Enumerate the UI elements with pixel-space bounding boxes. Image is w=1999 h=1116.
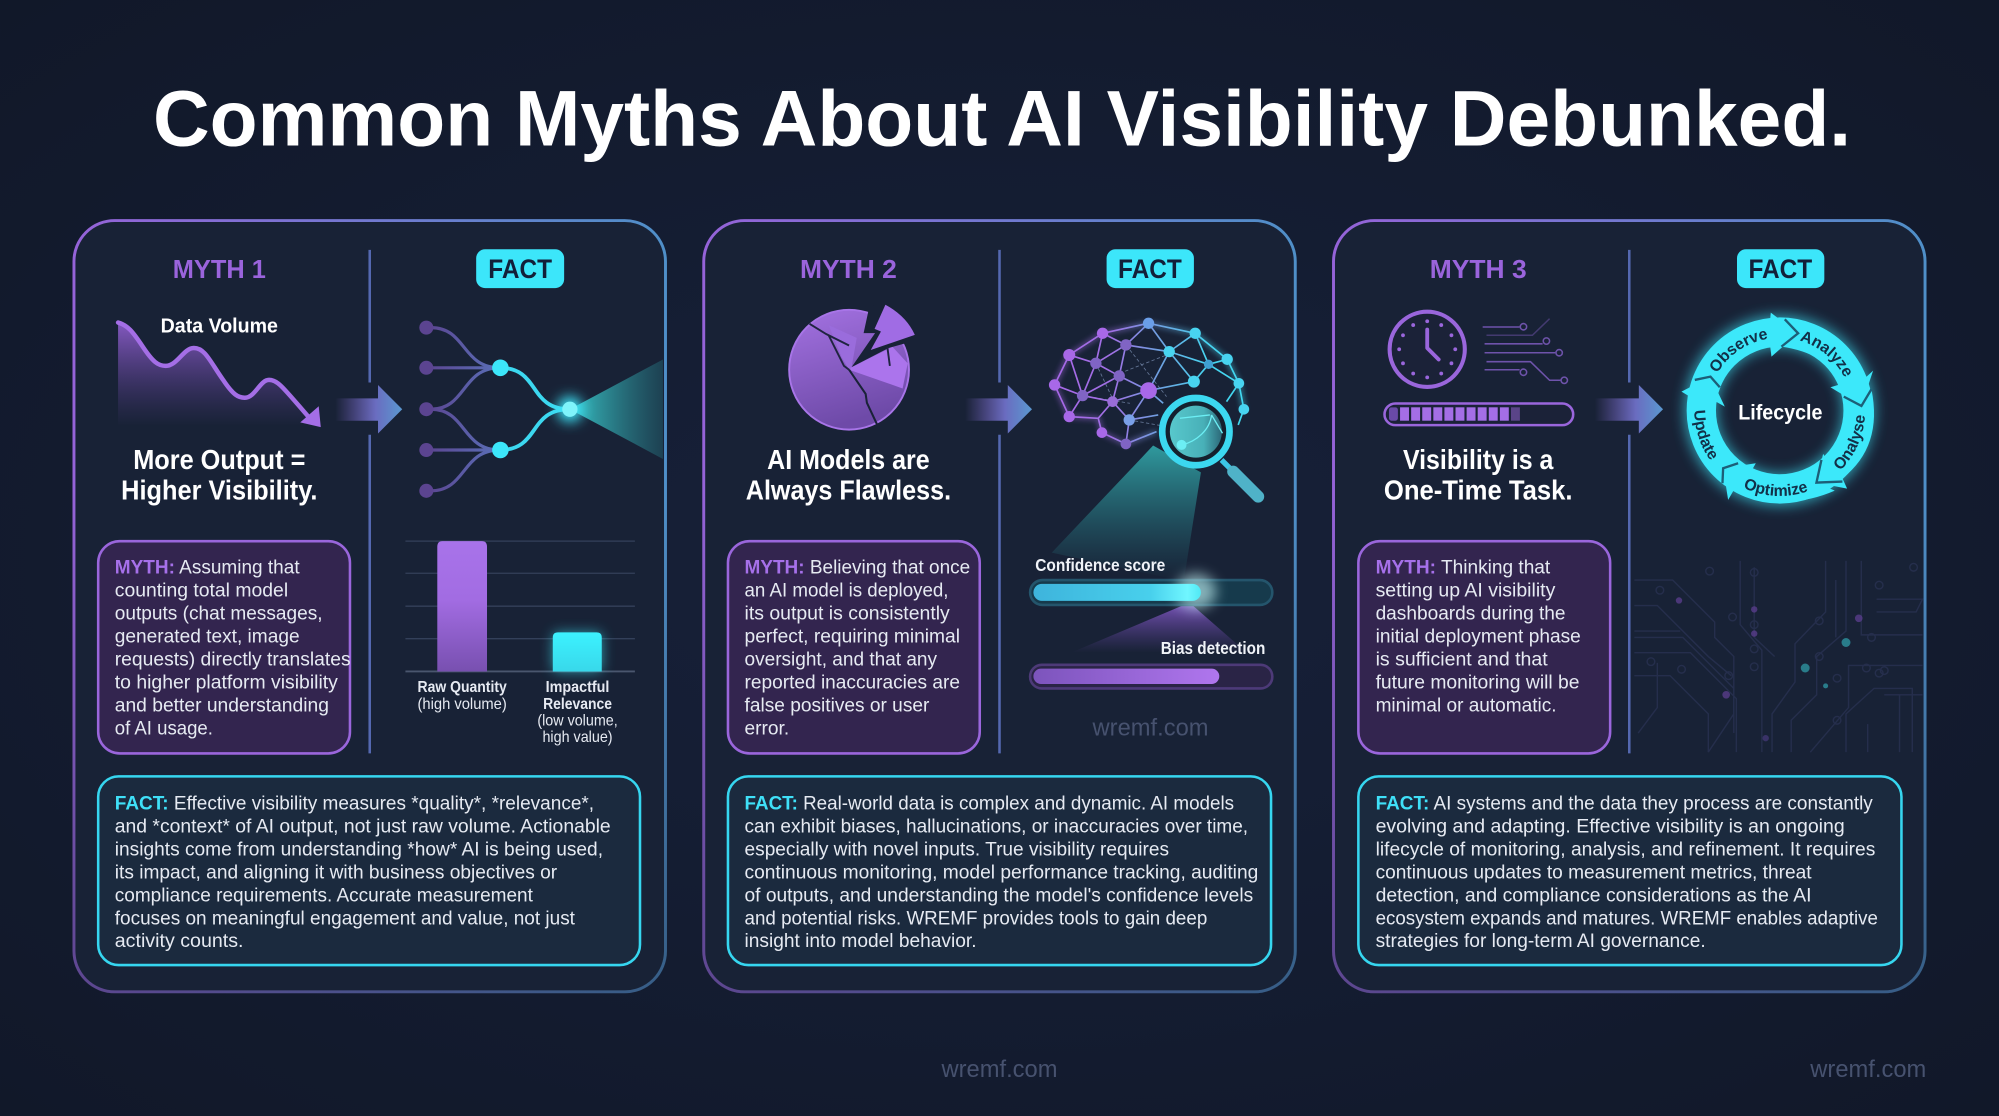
- meter: confidence score: Confidence score: [1035, 555, 1165, 575]
- heading: myth 1: MYTH 1: [173, 256, 266, 284]
- headline: myth 2: Always Flawless.: [746, 475, 951, 506]
- icon: cracked pie: [789, 300, 920, 430]
- myth text box: setting up AI visibility: [1376, 581, 1556, 602]
- chart: quantity vs relevance bars: Impactful: [546, 679, 609, 696]
- chart: quantity vs relevance bars: high value): [542, 729, 613, 746]
- myth text box: [728, 541, 980, 753]
- headline: myth 2: AI Models are: [767, 444, 930, 475]
- badge: fact: FACT: [488, 254, 553, 284]
- fact text box: can exhibit biases, hallucinations, or inaccuracies over time,: [745, 816, 1248, 837]
- myth text box: an AI model is deployed,: [745, 581, 949, 602]
- circuit board backdrop: [1634, 561, 1922, 752]
- fact text box: continuous updates to measurement metrics, threat: [1376, 862, 1812, 883]
- fact text box: lifecycle of monitoring, analysis, and refinement. It requires: [1376, 839, 1875, 860]
- headline: myth 1: [121, 444, 317, 506]
- headline: myth 3: [1384, 444, 1573, 506]
- magnifier: [1162, 398, 1258, 497]
- myth text box: perfect, requiring minimal: [745, 627, 960, 648]
- myth text box: initial deployment phase: [1376, 627, 1581, 648]
- heading: myth 3: MYTH 3: [1430, 256, 1527, 284]
- fact text box: FACT: Effective visibility measures *quality*, *relevance*,: [115, 794, 594, 815]
- icon: clock: [1390, 312, 1465, 387]
- diagram: lifecycle ring: [1676, 306, 1884, 515]
- badge: fact: [1107, 249, 1194, 288]
- circuit glow nodes: [1676, 597, 1863, 741]
- myth text box: oversight, and that any: [745, 649, 937, 670]
- fact text box: especially with novel inputs. True visibility requires: [745, 839, 1169, 860]
- myth text box: counting total model: [115, 581, 288, 602]
- myth text box: is sufficient and that: [1376, 649, 1548, 670]
- myth text box: future monitoring will be: [1376, 672, 1580, 693]
- footer watermark centre: wremf.com: [941, 1056, 1058, 1083]
- myth text box: error.: [745, 718, 789, 739]
- purple beam: [1071, 603, 1247, 653]
- myth text box: of AI usage.: [115, 718, 213, 739]
- fact text box: [1358, 776, 1901, 965]
- myth text box: [98, 541, 351, 753]
- myth text box: dashboards during the: [1376, 604, 1566, 625]
- icon: scan beam: [1052, 446, 1201, 581]
- fact text box: insight into model behavior.: [745, 931, 977, 952]
- heading: myth 2: MYTH 2: [800, 256, 897, 284]
- fact text box: evolving and adapting. Effective visibility is an ongoing: [1376, 816, 1845, 837]
- footer watermark right: wremf.com: [1809, 1056, 1926, 1083]
- badge: fact: FACT: [1748, 254, 1813, 284]
- chart: quantity vs relevance bars: (high volume): [418, 696, 507, 713]
- badge: fact: FACT: [1118, 254, 1182, 284]
- myth text box: false positives or user: [745, 695, 930, 716]
- fact text box: detection, and compliance considerations as the AI: [1376, 885, 1812, 906]
- diagram: lifecycle ring: Lifecycle: [1738, 399, 1822, 424]
- chart: quantity vs relevance bars: [405, 541, 635, 746]
- fact text box: activity counts.: [115, 931, 244, 952]
- icon: funnel network: [419, 321, 663, 498]
- fact text box: and potential risks. WREMF provides tools to gain deep: [745, 908, 1207, 929]
- panel frame: [704, 221, 1295, 992]
- headline: myth 1: Higher Visibility.: [121, 475, 317, 506]
- myth text box: MYTH: Thinking that: [1376, 558, 1551, 579]
- badge: fact: [476, 249, 564, 288]
- meter: bias detection: Bias detection: [1161, 638, 1265, 658]
- myth text box: and better understanding: [115, 695, 329, 716]
- myth text box: reported inaccuracies are: [745, 672, 960, 693]
- headline: myth 1: More Output =: [133, 444, 305, 475]
- headline: myth 3: One-Time Task.: [1384, 475, 1573, 506]
- ring labels: Analyze: [1800, 332, 1851, 376]
- fact text box: and *context* of AI output, not just raw volume. Actionable: [115, 816, 611, 837]
- icon: brain network with magnifier: [1049, 318, 1258, 497]
- meter: bias detection: [1030, 638, 1272, 688]
- panel frame: [74, 221, 665, 992]
- arrow segments: [1681, 313, 1874, 501]
- divider with arrow: [1595, 250, 1663, 753]
- divider with arrow: [965, 250, 1032, 753]
- fact text box: FACT: Real-world data is complex and dynamic. AI models: [745, 794, 1234, 815]
- fact text box: [728, 776, 1271, 965]
- badge: fact: [1737, 249, 1824, 288]
- panel frame: [1334, 221, 1925, 992]
- fact text box: ecosystem expands and matures. WREMF enables adaptive: [1376, 908, 1878, 929]
- chart: quantity vs relevance bars: Raw Quantity: [418, 679, 507, 696]
- headline: myth 3: Visibility is a: [1403, 444, 1554, 475]
- myth text box: its output is consistently: [745, 604, 950, 625]
- icon: progress bar: [1385, 403, 1573, 425]
- chart: data volume declining: Data Volume: [161, 316, 278, 338]
- panel: myth 2: [704, 221, 1295, 992]
- watermark: wremf.com: [1092, 715, 1209, 742]
- ring labels: Onalyse: [1834, 415, 1865, 468]
- icon: fading circuit lines: [1483, 319, 1567, 383]
- ring labels: Observe: [1710, 331, 1768, 371]
- fact text box: continuous monitoring, model performance tracking, auditing: [745, 862, 1258, 883]
- myth text box: minimal or automatic.: [1376, 695, 1557, 716]
- panel: myth 1: [74, 221, 665, 992]
- fact text box: FACT: AI systems and the data they process are constantly: [1376, 794, 1873, 815]
- myth text box: outputs (chat messages,: [115, 604, 323, 625]
- panel: myth 3: [1332, 219, 1926, 994]
- fact text box: insights come from understanding *how* AI is being used,: [115, 839, 603, 860]
- myth text box: MYTH: Assuming that: [115, 558, 300, 579]
- title: Common Myths About AI Visibility Debunked.: [153, 73, 1851, 162]
- fact text box: compliance requirements. Accurate measurement: [115, 885, 534, 906]
- fact text box: its impact, and aligning it with business objectives or: [115, 862, 558, 883]
- meter: confidence score: [1030, 555, 1272, 609]
- myth text box: to higher platform visibility: [115, 672, 338, 693]
- fact text box: of outputs, and understanding the model's confidence levels: [745, 885, 1253, 906]
- ring labels: [1692, 331, 1865, 496]
- chart: data volume declining: [118, 316, 321, 427]
- myth text box: MYTH: Believing that once: [745, 558, 970, 579]
- fact text box: [98, 776, 640, 965]
- ring labels: Optimize: [1745, 479, 1808, 496]
- myth text box: requests) directly translates: [115, 649, 351, 670]
- divider with arrow: [335, 250, 402, 753]
- chart: quantity vs relevance bars: Relevance: [543, 696, 612, 713]
- fact text box: focuses on meaningful engagement and value, not just: [115, 908, 576, 929]
- chart: quantity vs relevance bars: (low volume,: [537, 712, 618, 729]
- myth text box: generated text, image: [115, 627, 300, 648]
- headline: myth 2: [746, 444, 951, 506]
- myth text box: [1358, 541, 1610, 753]
- fact text box: strategies for long-term AI governance.: [1376, 931, 1706, 952]
- ring labels: Update: [1692, 410, 1716, 460]
